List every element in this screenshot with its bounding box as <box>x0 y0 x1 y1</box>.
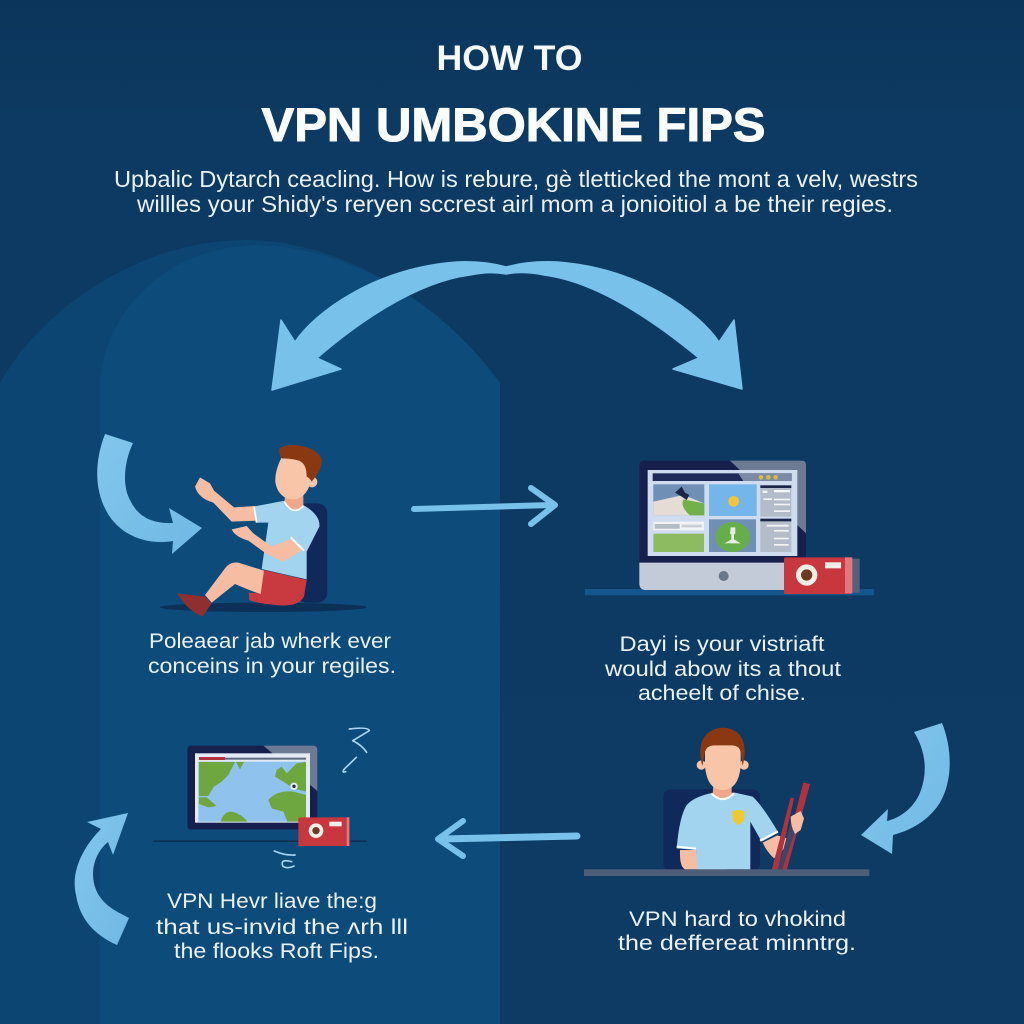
illustration: laptop with screen panels <box>585 461 874 595</box>
arrow: left pointing <box>438 821 577 856</box>
torso <box>253 501 319 579</box>
red box <box>298 817 349 846</box>
arrow: curved arrow top left <box>97 434 202 554</box>
squiggles <box>274 728 369 868</box>
head <box>275 457 312 499</box>
collar and neck <box>284 495 303 510</box>
background arch: outer <box>0 240 500 1024</box>
torso <box>677 793 778 869</box>
laptop body <box>639 461 806 565</box>
intro text: Upbalic Dytarch ceacling. How is rebure, gè tletticked the mont a velv, westrs <box>114 166 918 192</box>
illustration: seated person <box>160 445 367 617</box>
screen <box>195 753 310 823</box>
world map <box>198 762 306 822</box>
laptop body <box>187 746 317 829</box>
top bar <box>653 473 792 481</box>
leg <box>205 562 264 603</box>
panel: left column arch <box>100 245 500 1024</box>
lower arm <box>232 526 303 562</box>
arrow: curved arrow right <box>861 723 950 854</box>
arrow: curved arrow bottom left <box>75 813 129 945</box>
laptop base <box>639 563 797 590</box>
text: step four: VPN hard to vhokind <box>629 908 846 931</box>
red shorts <box>249 570 307 605</box>
text: step three: the flooks Roft Fips. <box>174 940 379 963</box>
image panel <box>653 484 704 515</box>
text: step two <box>604 633 841 705</box>
sleeve <box>290 517 319 551</box>
right arm <box>763 835 792 858</box>
intro text <box>114 166 918 217</box>
text: step one: conceins in your regiles. <box>148 655 396 678</box>
head <box>697 760 706 770</box>
illustration: person at desk <box>584 728 869 876</box>
upper arm <box>195 477 257 522</box>
text: step one <box>148 630 396 678</box>
chair back <box>297 503 327 603</box>
collar and neck <box>713 785 732 798</box>
title: how to: HOW TO <box>436 39 582 78</box>
text: step four <box>618 908 856 955</box>
red device <box>771 797 794 873</box>
map pin <box>290 783 298 790</box>
glare <box>263 746 317 791</box>
text: step four: the deffereat minntrg. <box>618 932 856 955</box>
intro text: willles your Shidy's reryen sccrest airl mom a jonioitiol a be their regies. <box>136 191 893 217</box>
chair <box>663 789 760 871</box>
text: step two: acheelt of chise. <box>638 682 806 705</box>
sleeve trims <box>677 847 696 849</box>
title: main heading: VPN UMBOKINE FIPS <box>262 98 766 151</box>
left forearm <box>680 850 727 869</box>
red box <box>852 559 860 593</box>
lower left panels <box>653 522 704 530</box>
text: step three: VPN Hevr liave the:g <box>167 890 377 913</box>
shelf <box>585 589 874 595</box>
sun panel <box>709 484 757 516</box>
hair <box>279 445 322 482</box>
hair <box>700 728 745 766</box>
text: step three: that us-invid the ᴧrh lll <box>156 916 408 939</box>
sidebars <box>760 485 791 517</box>
shoe <box>177 593 212 617</box>
screen <box>648 470 797 556</box>
arrow: right pointing <box>414 488 555 524</box>
illustration: laptop with world map <box>153 728 369 868</box>
text: step three <box>156 890 408 963</box>
desk <box>584 869 869 876</box>
text: step two: would abow its a thout <box>604 658 841 681</box>
arrow: large double curved arrow <box>272 262 742 390</box>
hand <box>791 811 804 834</box>
floor shadow <box>160 603 367 612</box>
icon panel <box>709 519 756 552</box>
text: step one: Poleaear jab wherk ever <box>149 630 391 653</box>
glare <box>730 461 806 533</box>
text: step two: Dayi is your vistriaft <box>620 633 825 656</box>
shelf line <box>153 840 367 842</box>
badge <box>732 810 745 825</box>
